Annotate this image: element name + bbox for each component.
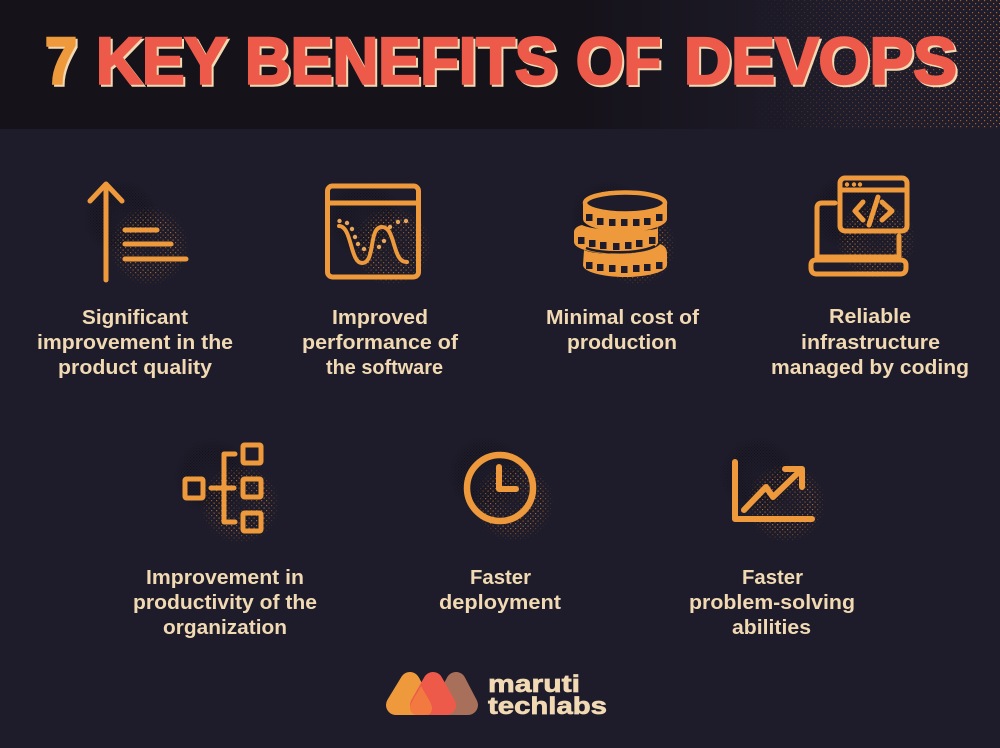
- caption: software performance: performance of: [302, 331, 458, 354]
- caption: reliable infrastructure: [771, 305, 969, 379]
- caption: minimal cost: Minimal cost of: [546, 306, 699, 329]
- caption: problem solving: abilities: [732, 616, 811, 639]
- caption: problem solving: [689, 566, 855, 639]
- icon: up arrow with lines: [83, 180, 189, 286]
- title: OF: [576, 24, 661, 98]
- logo mark: [396, 682, 468, 715]
- icon: org hierarchy: [174, 438, 280, 544]
- icon: laptop with code window: [810, 174, 916, 280]
- caption: minimal cost: [546, 306, 699, 354]
- logo wordmark: techlabs: [488, 693, 607, 720]
- caption: organization productivity: organization: [163, 616, 287, 639]
- icon: performance chart window: [326, 180, 432, 286]
- caption: organization productivity: productivity of the: [133, 591, 317, 614]
- benefit 4: reliable infrastructure: [771, 174, 969, 379]
- title: DEVOPS: [686, 26, 959, 100]
- title: 7: [47, 26, 79, 100]
- caption: reliable infrastructure: infrastructure: [801, 331, 940, 354]
- icon: rising line chart: [720, 437, 826, 543]
- caption: minimal cost: production: [567, 331, 677, 354]
- title: [45, 24, 959, 100]
- title: KEY: [96, 24, 227, 98]
- caption: organization productivity: Improvement in: [146, 566, 304, 589]
- benefit 1: product quality: [37, 180, 233, 379]
- caption: organization productivity: [133, 566, 317, 639]
- caption: reliable infrastructure: Reliable: [829, 305, 911, 328]
- logo wordmark: maruti: [488, 671, 580, 698]
- caption: faster deployment: Faster: [470, 566, 531, 589]
- header band: [0, 0, 1000, 129]
- caption: problem solving: problem-solving: [689, 591, 855, 614]
- title: BENEFITS: [245, 24, 557, 98]
- caption: software performance: [302, 306, 458, 379]
- logo: maruti techlabs: [396, 671, 607, 720]
- caption: problem solving: Faster: [742, 566, 803, 589]
- caption: product quality: Significant: [82, 306, 188, 329]
- caption: software performance: the software: [326, 356, 443, 379]
- caption: reliable infrastructure: managed by coding: [771, 356, 969, 379]
- title: OF: [578, 26, 663, 100]
- title: KEY: [98, 26, 229, 100]
- benefit 5: organization productivity: [133, 438, 317, 639]
- benefit 6: faster deployment: [439, 436, 561, 614]
- caption: faster deployment: [439, 566, 561, 614]
- title: BENEFITS: [247, 26, 559, 100]
- icon: stack of coins: [570, 180, 676, 286]
- logo wordmark: [488, 671, 607, 720]
- benefit 7: problem solving: [689, 437, 855, 639]
- benefit 3: minimal cost: [546, 180, 699, 354]
- caption: product quality: [37, 306, 233, 379]
- caption: product quality: improvement in the: [37, 331, 233, 354]
- caption: software performance: Improved: [332, 306, 428, 329]
- caption: product quality: product quality: [58, 356, 213, 379]
- icon: clock: [448, 436, 554, 542]
- title: 7: [45, 24, 77, 98]
- title: DEVOPS: [684, 24, 957, 98]
- benefit 2: software performance: [302, 180, 458, 379]
- caption: faster deployment: deployment: [439, 591, 561, 614]
